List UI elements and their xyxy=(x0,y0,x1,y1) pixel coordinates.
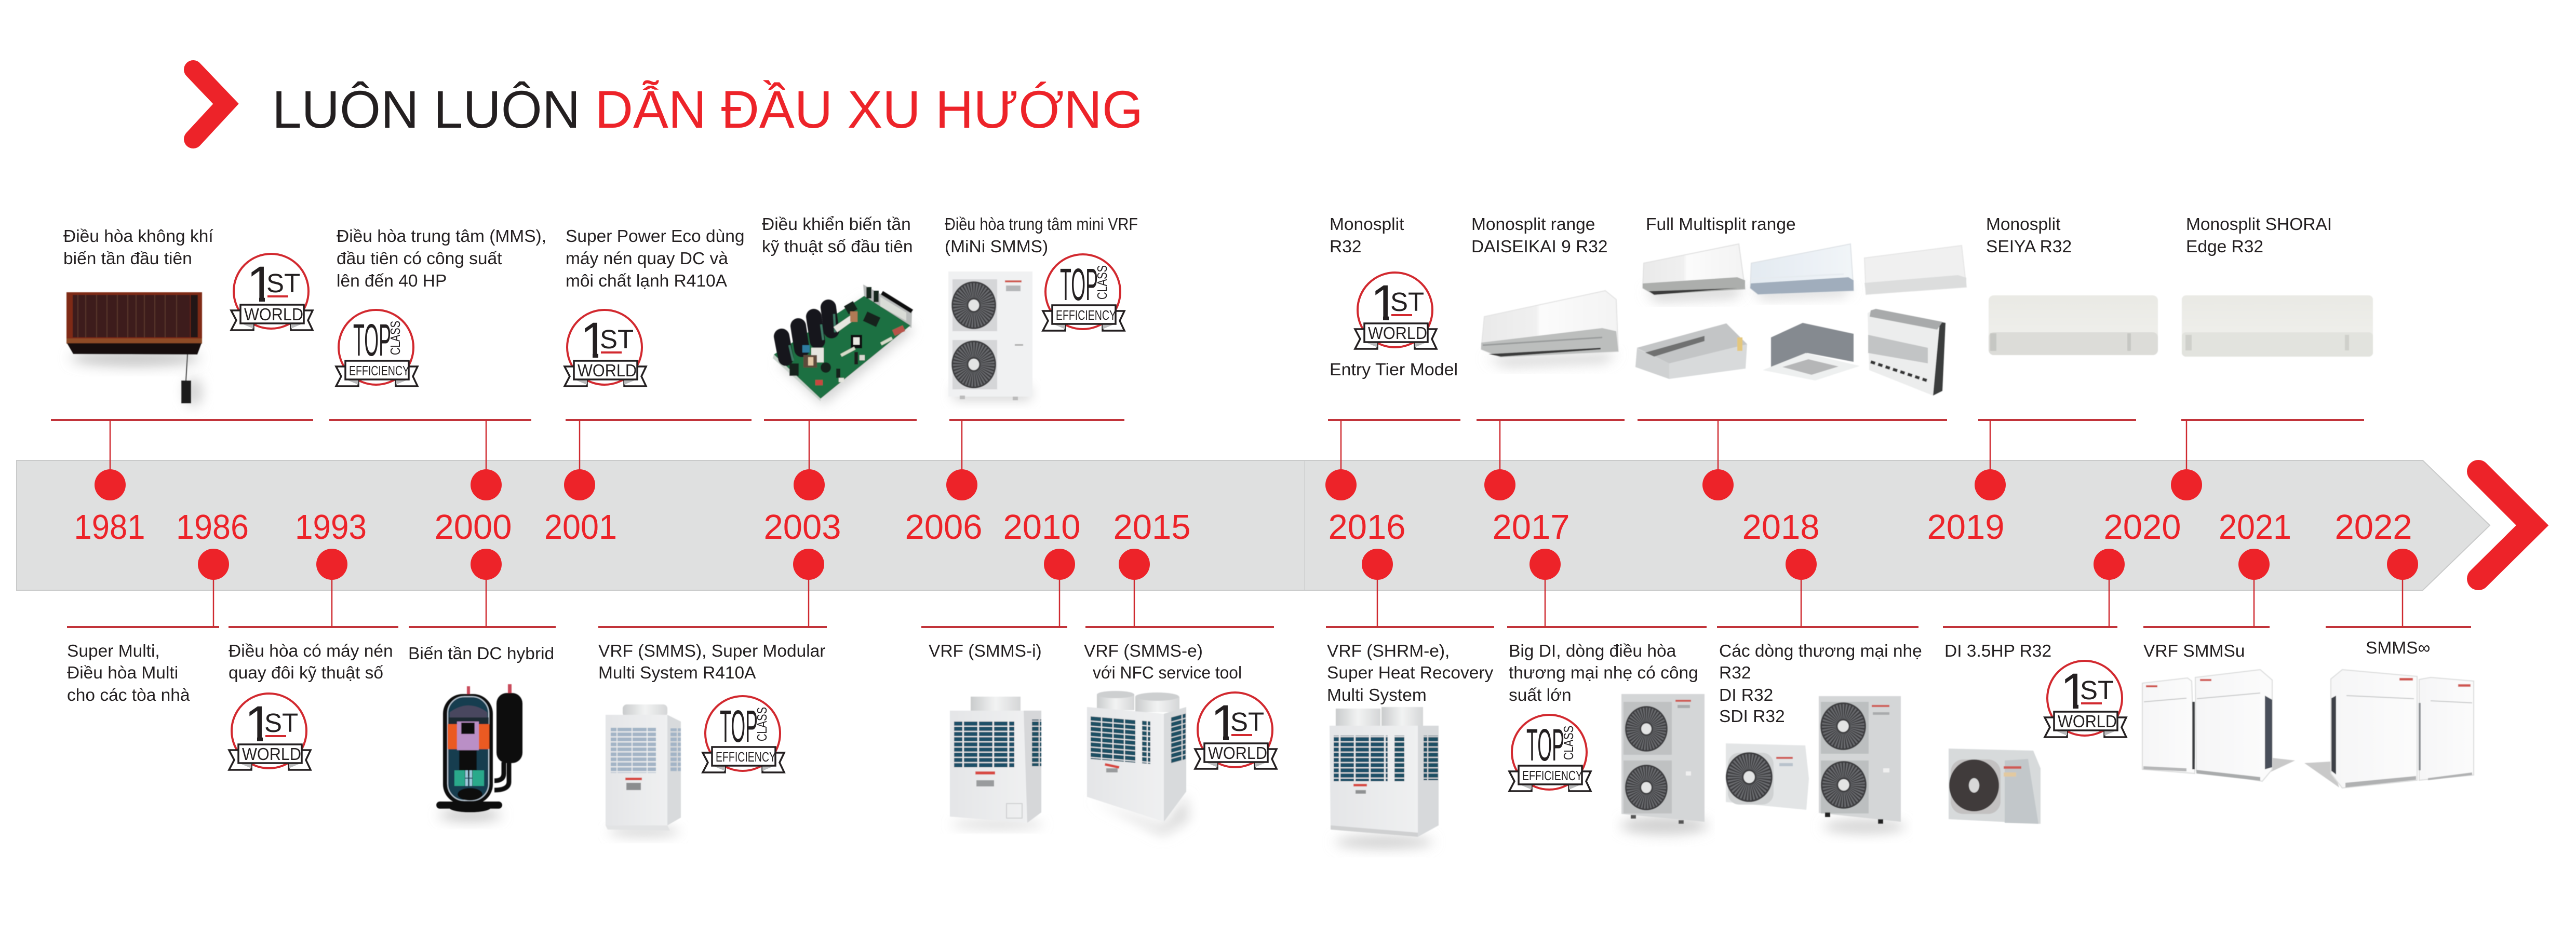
connector xyxy=(2326,549,2471,627)
badge: 1st world: WORLD xyxy=(578,361,637,380)
year labels: 2015 xyxy=(1113,508,1191,547)
year labels: 2022 xyxy=(2334,508,2412,547)
text: MMS: Điều hòa trung tâm (MMS), xyxy=(337,227,546,246)
text: VRF SMMS-e: với NFC service tool xyxy=(1093,663,1242,683)
connector xyxy=(51,420,313,500)
badge: 1st world: WORLD xyxy=(242,744,301,764)
text: VRF SMMS-e: VRF (SMMS-e) xyxy=(1084,642,1203,661)
product: wall unit one xyxy=(1643,244,1745,301)
badge: 1st world: 1 xyxy=(1371,275,1399,331)
milestone 2015 bottom xyxy=(1084,549,1277,836)
text: digital inverter control: kỹ thuật số đầu tiên xyxy=(762,237,913,256)
product: SMMS outdoor unit xyxy=(606,704,681,837)
text: light commercial R32: SDI R32 xyxy=(1719,707,1785,726)
connector xyxy=(2143,549,2270,627)
badge: top class: CLASS xyxy=(387,321,403,355)
milestone 2017 bottom xyxy=(1507,549,1709,835)
milestone 2022 bottom xyxy=(2304,549,2474,788)
connector xyxy=(1326,549,1494,627)
badge: 1st world xyxy=(1195,692,1277,769)
connector xyxy=(409,549,556,627)
milestone 1993 bottom xyxy=(229,549,398,770)
product: Seiya wall unit xyxy=(1989,295,2158,355)
year labels: 2016 xyxy=(1328,508,1406,547)
badge: 1st world: 1 xyxy=(247,256,275,313)
year labels: 1993 xyxy=(295,508,367,547)
text: mini VRF: Điều hòa trung tâm mini VRF xyxy=(945,215,1138,234)
product: small outdoor unit xyxy=(1726,743,1809,810)
badge: top class: EFFICIENCY xyxy=(1056,307,1116,323)
badge: top class: EFFICIENCY xyxy=(1522,768,1582,783)
badge: 1st world xyxy=(1355,273,1437,349)
connector xyxy=(921,549,1075,627)
text: super power eco: Super Power Eco dùng xyxy=(566,227,745,246)
text: SHRM-e: VRF (SHRM-e), xyxy=(1327,642,1450,661)
year labels: 2017 xyxy=(1492,508,1570,547)
badge: 1st world: ST xyxy=(266,268,300,298)
badge: 1st world xyxy=(2045,661,2126,737)
connector xyxy=(1638,420,1947,500)
connector xyxy=(1477,420,1625,500)
badge: 1st world: ST xyxy=(600,324,634,354)
badge: top class: CLASS xyxy=(754,707,770,741)
text: light commercial R32: Các dòng thương mại nhẹ xyxy=(1719,642,1922,661)
title text: LUÔN LUÔN DẪN ĐẦU XU HƯỚNG xyxy=(272,80,1143,139)
year labels: 2018 xyxy=(1742,508,1820,547)
badge: 1st world xyxy=(231,254,313,330)
badge: 1st world: WORLD xyxy=(1208,743,1267,763)
year labels: 2021 xyxy=(2219,508,2291,547)
connector xyxy=(764,420,917,500)
icon: large right chevron xyxy=(2478,471,2532,579)
connector xyxy=(1717,549,1918,627)
text: super power eco: máy nén quay DC và xyxy=(566,249,728,268)
text: big DI: suất lớn xyxy=(1509,686,1572,705)
text: entry tier model: Entry Tier Model xyxy=(1330,360,1458,379)
text: VRF SMMS: VRF (SMMS), Super Modular xyxy=(598,642,825,661)
text: first inverter air conditioner: biến tần đầu tiên xyxy=(63,249,192,268)
connector xyxy=(2171,420,2364,500)
product: cassette unit xyxy=(1763,323,1860,381)
product: Daiseikai wall unit xyxy=(1481,291,1618,366)
milestone 2017 top xyxy=(1471,215,1625,500)
milestone 2000 top xyxy=(329,227,546,500)
badge: 1st world: 1 xyxy=(2060,663,2088,719)
product: wall unit two xyxy=(1750,244,1854,299)
text: SHRM-e: Super Heat Recovery xyxy=(1327,663,1494,683)
badge: top class: TOP xyxy=(1060,260,1098,310)
text: DI 3.5HP: DI 3.5HP R32 xyxy=(1944,642,2051,661)
text: digital inverter control: Điều khiển biến tần xyxy=(762,215,911,234)
badge: 1st world xyxy=(565,310,646,386)
text: VRF SMMS-i: VRF (SMMS-i) xyxy=(929,642,1042,661)
milestone 1981 top xyxy=(51,227,313,500)
badge: top class: TOP xyxy=(1526,720,1564,770)
text: light commercial R32: DI R32 xyxy=(1719,686,1773,705)
milestone 2000 bottom xyxy=(408,549,556,821)
text: first inverter air conditioner: Điều hòa không khí xyxy=(63,227,213,246)
product: ducted unit xyxy=(1635,323,1747,379)
milestone 2018 bottom xyxy=(1717,549,1922,834)
connector xyxy=(1325,420,1460,500)
product: wall unit three xyxy=(1864,246,1966,294)
product: inverter circuit board xyxy=(773,284,914,405)
year labels xyxy=(74,508,2412,547)
text: monosplit R32: R32 xyxy=(1330,237,1361,256)
text: MMS: lên đến 40 HP xyxy=(337,271,447,291)
year labels: 1981 xyxy=(74,508,145,547)
product: mini SMMS outdoor unit xyxy=(948,271,1032,400)
text: shorai edge: Edge R32 xyxy=(2186,237,2263,256)
text: super power eco: môi chất lạnh R410A xyxy=(566,271,728,291)
badge: top class: EFFICIENCY xyxy=(716,749,776,765)
product: wood indoor unit with remote xyxy=(66,292,203,406)
year labels: 2006 xyxy=(905,508,983,547)
product: SHRM-e outdoor unit xyxy=(1330,707,1439,849)
connector xyxy=(67,549,229,627)
connector xyxy=(229,549,398,627)
text: full multisplit: Full Multisplit range xyxy=(1646,215,1796,234)
text: hybrid DC inverter: Biến tần DC hybrid xyxy=(408,644,554,663)
connector xyxy=(1507,549,1707,627)
connector xyxy=(1943,549,2125,627)
product: SMMSu outdoor units xyxy=(2142,670,2295,781)
icon: title chevron xyxy=(193,70,226,139)
year labels: 2003 xyxy=(763,508,841,547)
year labels: 2019 xyxy=(1927,508,2005,547)
milestone 2020 top xyxy=(2171,215,2373,500)
text: super multi: Super Multi, xyxy=(67,642,160,661)
product: DI 3.5HP outdoor unit xyxy=(1949,749,2041,824)
text: monosplit R32: Monosplit xyxy=(1330,215,1404,234)
badge: 1st world: 1 xyxy=(580,312,608,369)
text: MMS: đầu tiên có công suất xyxy=(337,249,502,268)
badge: top class: CLASS xyxy=(1094,265,1110,300)
text: big DI: Big DI, dòng điều hòa xyxy=(1509,642,1676,661)
milestone 2019 top xyxy=(1975,215,2158,500)
badge: 1st world: ST xyxy=(264,708,298,738)
badge: top class: EFFICIENCY xyxy=(349,363,409,378)
product: Shorai wall unit xyxy=(2182,295,2373,357)
connector xyxy=(329,420,531,500)
product: floor console unit xyxy=(1868,309,1946,396)
product: compressor cutaway xyxy=(436,684,522,821)
text: daiseikai 9: Monosplit range xyxy=(1471,215,1595,234)
text: SHRM-e: Multi System xyxy=(1327,686,1427,705)
connector xyxy=(564,420,752,500)
badge: 1st world: WORLD xyxy=(244,305,303,324)
badge: 1st world: 1 xyxy=(1211,695,1239,751)
timeline band arrow xyxy=(17,460,2490,590)
text: super multi: cho các tòa nhà xyxy=(67,686,190,705)
text: light commercial R32: R32 xyxy=(1719,663,1751,683)
product: SMMS-e outdoor unit xyxy=(1087,691,1189,836)
milestone 2016 bottom xyxy=(1326,549,1494,849)
badge: top class xyxy=(336,310,418,386)
milestone 2001 top xyxy=(564,227,752,500)
product: big DI outdoor unit xyxy=(1620,694,1709,835)
product: SMMS infinity outdoor units xyxy=(2304,670,2474,788)
text: VRF SMMSu: VRF SMMSu xyxy=(2143,642,2245,661)
badge: 1st world: 1 xyxy=(245,696,273,752)
badge: 1st world xyxy=(229,694,311,770)
milestone 2018 top xyxy=(1635,215,1966,500)
milestone 2003 bottom xyxy=(598,549,827,837)
milestone 2006 top xyxy=(945,215,1138,500)
connector xyxy=(946,420,1124,500)
badge: 1st world: ST xyxy=(1230,707,1264,737)
milestone 2016 top xyxy=(1325,215,1460,500)
badge: top class: CLASS xyxy=(1561,726,1576,760)
badge: 1st world: WORLD xyxy=(2058,712,2117,731)
milestone 1986 bottom xyxy=(67,549,229,705)
year labels: 2001 xyxy=(544,508,617,547)
text: daiseikai 9: DAISEIKAI 9 R32 xyxy=(1471,237,1608,256)
milestone 2021 bottom xyxy=(2142,549,2295,781)
product: SMMS-i outdoor unit xyxy=(950,697,1044,828)
text: super multi: Điều hòa Multi xyxy=(67,663,178,683)
year labels: 2000 xyxy=(434,508,512,547)
milestone 2010 bottom xyxy=(921,549,1075,828)
badge: top class xyxy=(1043,254,1124,331)
text: seiya: Monosplit xyxy=(1986,215,2061,234)
text: mini VRF: (MiNi SMMS) xyxy=(945,237,1048,256)
connector xyxy=(1975,420,2136,500)
badge: top class xyxy=(1509,715,1591,791)
badge: 1st world: WORLD xyxy=(1368,323,1427,343)
product: tall outdoor unit xyxy=(1819,696,1906,834)
text: VRF SMMS: Multi System R410A xyxy=(598,663,756,683)
connector xyxy=(598,549,827,627)
badge: top class: TOP xyxy=(353,315,391,365)
badge: top class: TOP xyxy=(720,701,758,752)
badge: top class xyxy=(703,696,784,772)
year labels: 1986 xyxy=(176,508,249,547)
text: SMMS infinity: SMMS∞ xyxy=(2366,638,2430,658)
milestone 2020 bottom xyxy=(1943,549,2126,824)
text: big DI: thương mại nhẹ có công xyxy=(1509,663,1698,683)
badge: 1st world: ST xyxy=(1390,287,1424,317)
year labels: 2010 xyxy=(1003,508,1081,547)
milestone 2003 top xyxy=(762,215,917,500)
text: seiya: SEIYA R32 xyxy=(1986,237,2072,256)
year labels: 2020 xyxy=(2103,508,2181,547)
title xyxy=(193,70,1143,139)
text: digital dual rotary: quay đôi kỹ thuật số xyxy=(229,663,383,683)
text: shorai edge: Monosplit SHORAI xyxy=(2186,215,2332,234)
text: digital dual rotary: Điều hòa có máy nén xyxy=(229,642,393,661)
connector xyxy=(1085,549,1274,627)
badge: 1st world: ST xyxy=(2080,675,2114,705)
